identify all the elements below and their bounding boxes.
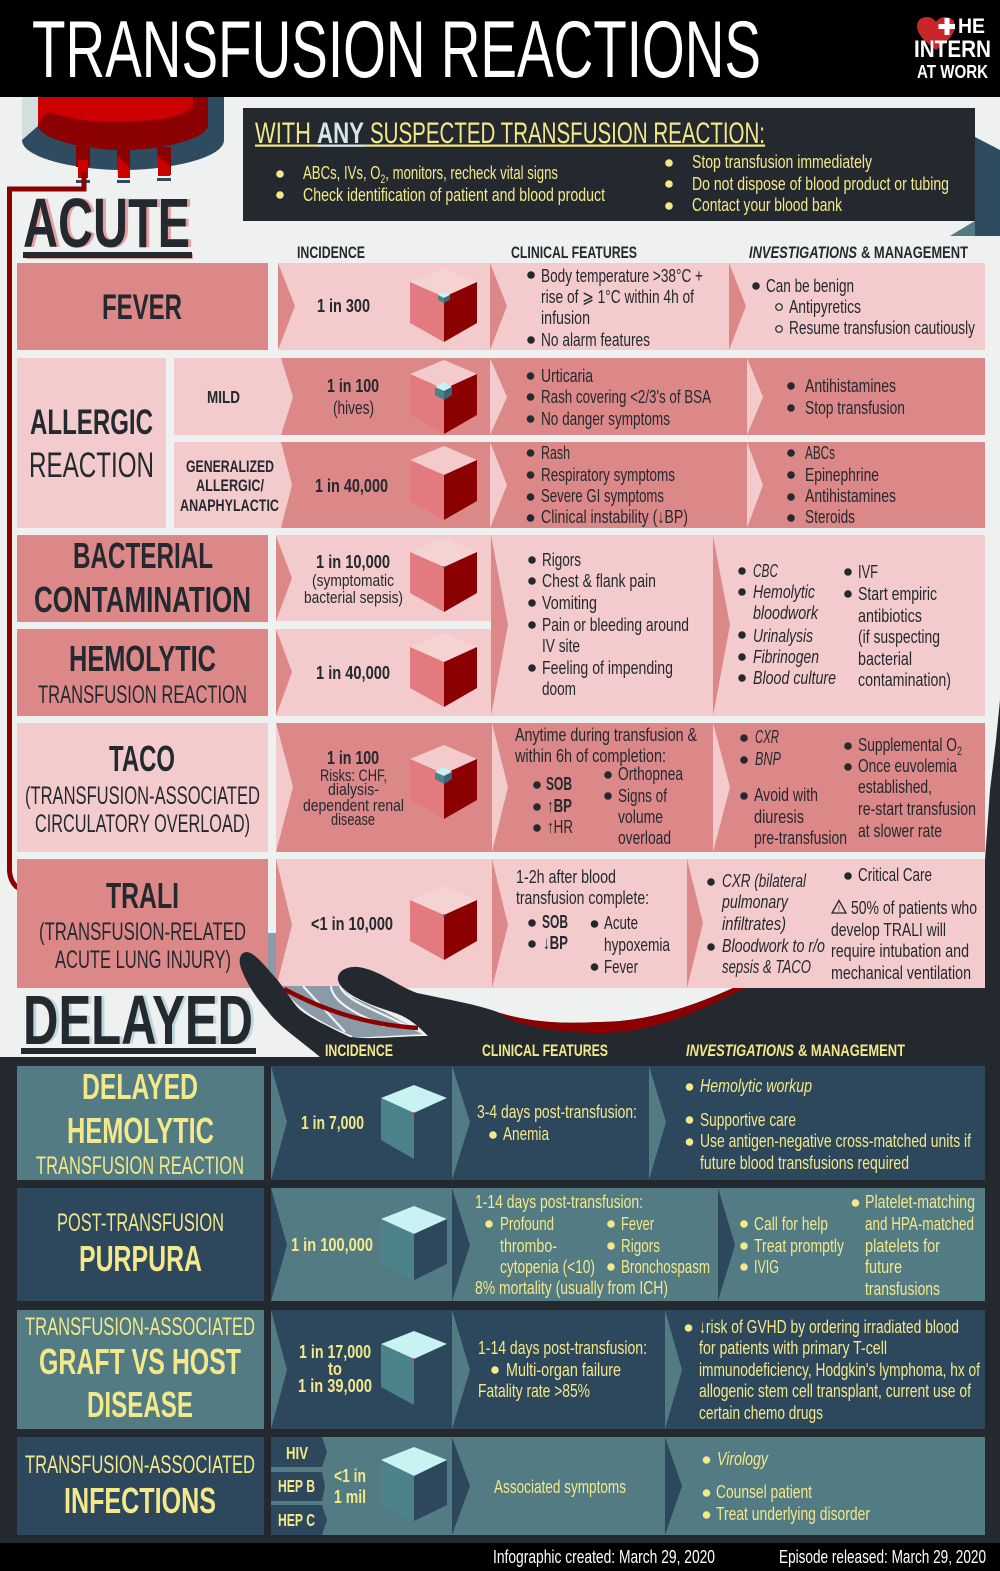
row: fever: rise of ⩾ 1°C within 4h of	[541, 286, 695, 307]
column headers acute: CLINICAL FEATURES	[511, 243, 637, 262]
sub-row: generalized anaphylactic: ANAPHYLACTIC	[180, 496, 279, 515]
row: graft vs host disease: 1-14 days post-transfusion:	[478, 1337, 647, 1358]
row: taco: pre-transfusion	[754, 827, 847, 848]
sub-row: bacterial contamination: CONTAMINATION	[34, 579, 251, 620]
sub-row: mild: No danger symptoms	[541, 408, 670, 429]
column headers acute	[297, 243, 968, 262]
shared clinical features	[528, 549, 689, 699]
row: trali: (TRANSFUSION-RELATED	[39, 918, 246, 946]
row: taco: Risks: CHF,	[320, 766, 387, 785]
row: delayed hemolytic: future blood transfusions required	[700, 1152, 909, 1173]
icon: graft vs host cube	[381, 1331, 447, 1405]
row: delayed hemolytic	[17, 1066, 985, 1180]
column headers delayed: CLINICAL FEATURES	[482, 1041, 608, 1060]
sub-row: generalized anaphylactic: ABCs	[805, 442, 835, 463]
column headers delayed	[325, 1041, 905, 1060]
row: trali: Acute	[604, 912, 638, 933]
logo: the intern at work	[914, 15, 991, 82]
row: graft vs host disease	[17, 1310, 985, 1429]
row: graft vs host disease: TRANSFUSION-ASSOCIATED	[25, 1313, 255, 1341]
icon: blood bag	[22, 97, 224, 183]
row: trali: SOB	[542, 911, 568, 932]
logo: the intern at work: AT WORK	[917, 62, 988, 82]
row: post-transfusion purpura: Call for help	[754, 1213, 828, 1234]
row: taco: disease	[331, 810, 375, 829]
footer: Infographic created: March 29, 2020	[493, 1546, 715, 1567]
sub-row: bacterial contamination	[17, 535, 491, 622]
heading: acute: ACUTE	[26, 184, 193, 262]
sub-row: mild: 1 in 100	[327, 375, 379, 396]
sub-row: mild: (hives)	[333, 397, 374, 418]
footer	[0, 1543, 1000, 1571]
icon: trali incidence cube	[410, 886, 477, 960]
shared management: (if suspecting	[858, 626, 940, 647]
row: fever: infusion	[541, 307, 590, 328]
callout right actions	[665, 151, 949, 215]
sub-row: bacterial contamination: (symptomatic	[312, 571, 394, 590]
shared management: IVF	[858, 561, 878, 582]
shared management: antibiotics	[858, 605, 922, 626]
callout heading: SUSPECTED TRANSFUSION REACTION:	[370, 117, 765, 150]
row: transfusion-associated infections: <1 in	[334, 1465, 366, 1486]
row: taco: CIRCULATORY OVERLOAD)	[35, 810, 250, 838]
row: transfusion-associated infections: 1 mil	[334, 1486, 366, 1507]
column headers delayed: INCIDENCE	[325, 1041, 393, 1060]
callout left actions: , monitors, recheck vital signs	[385, 162, 558, 183]
row: taco: CXR	[755, 726, 779, 747]
icon: fever incidence cube	[410, 268, 477, 342]
shared clinical features: doom	[542, 678, 576, 699]
sub-row: generalized anaphylactic: Respiratory symptoms	[541, 464, 675, 485]
row: taco: Once euvolemia	[858, 755, 958, 776]
icon: taco incidence cube	[410, 745, 477, 819]
row: trali: CXR (bilateral	[722, 870, 807, 891]
row: fever: Can be benign	[766, 275, 854, 296]
shared clinical features: IV site	[542, 635, 580, 656]
callout heading: WITH	[255, 117, 311, 150]
callout left actions	[276, 162, 605, 205]
row: trali: ACUTE LUNG INJURY)	[55, 946, 231, 974]
row: trali: infiltrates)	[722, 913, 786, 934]
row: trali: sepsis & TACO	[722, 956, 811, 977]
sub-row: hemolytic	[17, 629, 491, 716]
row: taco: Supplemental O	[858, 734, 991, 755]
callout left actions: ABCs, IVs, O	[303, 162, 412, 183]
row: taco: ↑HR	[547, 816, 573, 837]
row: graft vs host disease: 1 in 17,000	[299, 1341, 371, 1362]
row: post-transfusion purpura: transfusions	[865, 1278, 940, 1299]
row: allergic reaction: REACTION	[29, 446, 154, 485]
shared investigations: CBC	[753, 560, 778, 581]
icon: blood tube from bag	[10, 172, 84, 888]
row: transfusion-associated infections: TRANSFUSION-ASSOCIATED	[25, 1451, 255, 1479]
callout left actions: 2	[381, 172, 386, 186]
sub-row: generalized anaphylactic: ALLERGIC/	[196, 476, 264, 495]
row: post-transfusion purpura	[17, 1188, 985, 1301]
callout heading	[255, 117, 765, 150]
sub-row: mild: Stop transfusion	[805, 397, 905, 418]
row: post-transfusion purpura: 8% mortality (usually from ICH)	[475, 1277, 668, 1298]
heading: delayed: DELAYED	[23, 981, 253, 1059]
column headers delayed: & MANAGEMENT	[798, 1041, 905, 1060]
sub-row: generalized anaphylactic: Rash	[541, 442, 570, 463]
sub-row: generalized anaphylactic: 1 in 40,000	[315, 475, 388, 496]
row: taco: Signs of	[618, 785, 668, 806]
row: taco: BNP	[755, 748, 781, 769]
row: trali: hypoxemia	[604, 934, 671, 955]
row: delayed hemolytic: DELAYED	[82, 1066, 198, 1107]
row: graft vs host disease: to	[328, 1358, 342, 1379]
shared investigations: Urinalysis	[753, 625, 813, 646]
sub-row: generalized anaphylactic: Steroids	[805, 506, 855, 527]
row: delayed hemolytic: 3-4 days post-transfusion:	[477, 1101, 637, 1122]
row: transfusion-associated infections: Virology	[717, 1448, 769, 1469]
shared investigations: bloodwork	[753, 602, 819, 623]
sub-row: generalized anaphylactic: Epinephrine	[805, 464, 879, 485]
shared management: contamination)	[858, 669, 951, 690]
row: post-transfusion purpura: POST-TRANSFUSION	[57, 1209, 224, 1237]
panel: callout any suspected transfusion reaction	[243, 108, 975, 221]
shared investigations: Blood culture	[753, 667, 836, 688]
icon: delayed hemolytic cube	[381, 1085, 447, 1159]
shared clinical features: Chest & flank pain	[542, 570, 656, 591]
shared investigations	[738, 560, 836, 688]
row: trali: ↓BP	[543, 932, 568, 953]
row: post-transfusion purpura: Fever	[621, 1213, 654, 1234]
shared clinical features: Vomiting	[542, 592, 597, 613]
row: post-transfusion purpura: future	[865, 1256, 902, 1277]
row: fever: Antipyretics	[789, 296, 861, 317]
row: post-transfusion purpura: PURPURA	[79, 1238, 202, 1279]
row: transfusion-associated infections: INFECTIONS	[64, 1480, 216, 1521]
row: graft vs host disease: for patients with primary T-cell	[699, 1337, 887, 1358]
sub-row: mild	[174, 358, 985, 435]
sub-row: hemolytic: TRANSFUSION REACTION	[38, 681, 247, 709]
icon: warning triangle	[832, 900, 846, 914]
row: taco: 1 in 100	[327, 747, 379, 768]
callout right actions: Stop transfusion immediately	[692, 151, 873, 172]
callout heading: ANY	[317, 117, 364, 150]
row: fever: Body temperature >38°C +	[541, 265, 703, 286]
row: post-transfusion purpura: Treat promptly	[754, 1235, 845, 1256]
icon: hand holding the blood tube	[240, 700, 1000, 1057]
sub-row: bacterial contamination: bacterial sepsis)	[304, 588, 403, 607]
row: taco: 2	[957, 744, 962, 758]
row: transfusion-associated infections: HEP B	[278, 1476, 315, 1496]
row: trali: Bloodwork to r/o	[722, 935, 825, 956]
row: delayed hemolytic: Supportive care	[700, 1109, 796, 1130]
row: bacterial contamination and hemolytic	[17, 535, 985, 716]
logo: the intern at work: HE	[958, 15, 985, 38]
row: taco: ↑BP	[547, 795, 572, 816]
row: taco: Avoid with	[754, 784, 818, 805]
sub-row: mild: Urticaria	[541, 365, 594, 386]
row: taco: Anytime during transfusion &	[515, 724, 698, 745]
row: delayed hemolytic: TRANSFUSION REACTION	[36, 1152, 244, 1180]
row: taco: dependent renal	[303, 796, 404, 815]
sub-row: bacterial contamination: 1 in 10,000	[316, 551, 390, 572]
row: graft vs host disease: Multi-organ failure	[506, 1359, 621, 1380]
sub-row: hemolytic: 1 in 40,000	[316, 662, 390, 683]
row: trali	[17, 859, 985, 988]
row: taco: overload	[618, 827, 671, 848]
row: graft vs host disease: Fatality rate >85%	[478, 1380, 590, 1401]
row: post-transfusion purpura: 1-14 days post-transfusion:	[475, 1191, 643, 1212]
heading: delayed: DELAYED	[26, 981, 256, 1059]
row: trali: pulmonary	[721, 891, 789, 912]
row: graft vs host disease: certain chemo drugs	[699, 1402, 823, 1423]
row: transfusion-associated infections: HIV	[286, 1443, 308, 1463]
banner background behind callout	[950, 137, 1000, 236]
icon: infections cube	[381, 1447, 447, 1521]
row: allergic reaction	[17, 358, 985, 528]
row: post-transfusion purpura: 1 in 100,000	[291, 1234, 373, 1255]
sub-row: bacterial contamination: BACTERIAL	[73, 535, 213, 576]
row: fever: FEVER	[102, 288, 182, 327]
column headers delayed: INVESTIGATIONS	[686, 1041, 794, 1060]
row: taco: Orthopnea	[618, 763, 684, 784]
column headers acute: INCIDENCE	[297, 243, 365, 262]
row: taco: within 6h of completion:	[514, 745, 666, 766]
sub-row: generalized anaphylactic: Severe GI symptoms	[541, 485, 664, 506]
heading: acute: ACUTE	[23, 184, 190, 262]
row: graft vs host disease: 1 in 39,000	[298, 1375, 372, 1396]
row: taco: volume	[618, 806, 663, 827]
sub-row: generalized anaphylactic: GENERALIZED	[186, 457, 274, 476]
row: post-transfusion purpura: Rigors	[621, 1235, 660, 1256]
sub-row: generalized anaphylactic: Antihistamines	[805, 485, 896, 506]
row: delayed hemolytic: HEMOLYTIC	[67, 1110, 214, 1151]
shared management: Start empiric	[858, 583, 937, 604]
row: post-transfusion purpura: cytopenia (<10)	[500, 1256, 595, 1277]
shared clinical features: Feeling of impending	[542, 657, 673, 678]
row: post-transfusion purpura: Bronchospasm	[621, 1256, 710, 1277]
row: post-transfusion purpura: IVIG	[754, 1256, 779, 1277]
row: trali: <1 in 10,000	[311, 913, 393, 934]
icon: warning triangle: !	[838, 904, 840, 914]
row: taco	[17, 723, 985, 852]
row: taco: established,	[858, 776, 932, 797]
sub-row: mild: MILD	[207, 387, 240, 407]
sub-row: hemolytic: HEMOLYTIC	[69, 638, 216, 679]
icon: purpura cube	[381, 1206, 447, 1280]
row: trali: 1-2h after blood	[516, 866, 616, 887]
row: fever: 1 in 300	[317, 295, 370, 316]
row: transfusion-associated infections: HEP C	[278, 1510, 315, 1530]
callout right actions: Contact your blood bank	[692, 194, 843, 215]
bottom dark background	[0, 1057, 1000, 1543]
row: transfusion-associated infections	[17, 1437, 985, 1535]
row: taco: diuresis	[754, 806, 804, 827]
sub-row: mild: Antihistamines	[805, 375, 896, 396]
title bar	[0, 0, 1000, 97]
row: graft vs host disease: GRAFT VS HOST	[39, 1341, 241, 1382]
row: transfusion-associated infections: Associated symptoms	[494, 1476, 626, 1497]
shared management	[844, 561, 951, 690]
shared management: bacterial	[858, 648, 912, 669]
row: delayed hemolytic: Anemia	[503, 1123, 550, 1144]
column headers acute: INVESTIGATIONS	[749, 243, 857, 262]
row: taco: (TRANSFUSION-ASSOCIATED	[25, 782, 260, 810]
shared investigations: Fibrinogen	[753, 646, 819, 667]
row: taco: dialysis-	[328, 780, 379, 799]
row: post-transfusion purpura: platelets for	[865, 1235, 940, 1256]
sub-row: generalized anaphylactic	[174, 442, 985, 528]
shared investigations: Hemolytic	[753, 581, 816, 602]
row: transfusion-associated infections: Counsel patient	[716, 1481, 812, 1502]
row: post-transfusion purpura: Profound	[500, 1213, 554, 1234]
row: trali: TRALI	[106, 875, 179, 916]
row: trali: develop TRALI will	[831, 919, 946, 940]
row: delayed hemolytic: Hemolytic workup	[700, 1075, 812, 1096]
row: trali: Critical Care	[858, 864, 932, 885]
row: graft vs host disease: DISEASE	[87, 1384, 193, 1425]
shared clinical features: Pain or bleeding around	[542, 614, 689, 635]
row: post-transfusion purpura: thrombo-	[500, 1235, 557, 1256]
row: allergic reaction: ALLERGIC	[30, 403, 153, 442]
callout left actions: Check identification of patient and blood product	[303, 184, 605, 205]
sub-row: generalized anaphylactic: Clinical instability (↓BP)	[541, 506, 688, 527]
row: taco: SOB	[546, 773, 572, 794]
row: taco: TACO	[109, 738, 175, 779]
row: transfusion-associated infections: Treat underlying disorder	[716, 1503, 870, 1524]
row: fever: No alarm features	[541, 329, 650, 350]
row: fever	[17, 263, 985, 350]
shared clinical features: Rigors	[542, 549, 581, 570]
column headers acute: & MANAGEMENT	[861, 243, 968, 262]
row: taco: at slower rate	[858, 820, 942, 841]
row: trali: Fever	[604, 956, 638, 977]
row: delayed hemolytic: 1 in 7,000	[301, 1112, 364, 1133]
sub-row: mild: Rash covering <2/3's of BSA	[541, 386, 711, 407]
row: trali: transfusion complete:	[516, 887, 649, 908]
